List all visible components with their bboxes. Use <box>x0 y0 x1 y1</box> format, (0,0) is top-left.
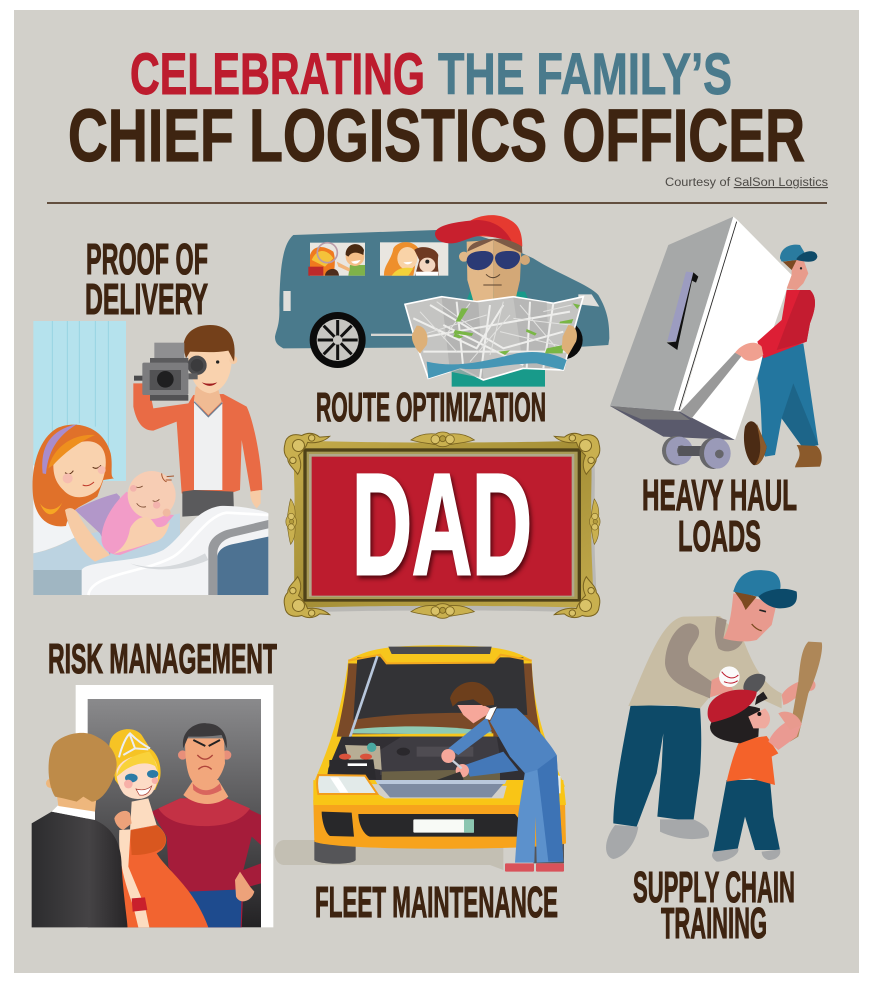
picture frame with DAD <box>284 432 600 618</box>
heading: proof of delivery: PROOF OF <box>86 235 208 284</box>
title line 1: THE FAMILY’S <box>438 42 732 107</box>
blanket and bed rail <box>82 506 268 595</box>
DAD text: DAD <box>352 444 532 605</box>
van body <box>275 230 609 348</box>
ornaments <box>284 432 600 618</box>
title line 1: CELEBRATING <box>130 42 425 107</box>
heading: supply chain training <box>633 863 795 948</box>
mother <box>33 424 120 562</box>
bed <box>33 465 180 595</box>
curtain <box>33 321 126 481</box>
white frame <box>76 685 273 927</box>
bat <box>790 642 822 742</box>
car front <box>313 775 566 849</box>
map <box>405 297 583 380</box>
credit: Courtesy of SalSon Logistics <box>665 177 828 189</box>
illustration: car with mechanic <box>275 645 566 872</box>
refrigerator <box>610 217 792 440</box>
illustration: prom date and father <box>32 685 273 927</box>
baby <box>101 471 176 555</box>
frame shadow <box>297 445 596 613</box>
heading: risk management: RISK MANAGEMENT <box>48 635 277 682</box>
mechanic <box>437 682 564 872</box>
driver <box>435 215 545 387</box>
van windows <box>283 242 599 336</box>
mover <box>735 245 822 467</box>
illustration: van and map <box>275 215 609 387</box>
boy <box>708 674 802 862</box>
heading: supply chain training: TRAINING <box>661 899 767 948</box>
young man from behind <box>32 733 132 927</box>
heading: proof of delivery <box>85 235 208 324</box>
title <box>68 42 805 177</box>
hand truck <box>662 353 742 469</box>
raised hood <box>313 645 565 787</box>
title line 1 <box>130 42 732 107</box>
ground shadow <box>275 840 503 870</box>
illustration: father teaching son baseball <box>606 570 822 862</box>
wheels <box>310 312 583 368</box>
gold frame <box>293 440 593 608</box>
heading: heavy haul loads: LOADS <box>678 512 761 561</box>
father with camera <box>133 325 262 517</box>
red canvas <box>312 457 572 596</box>
engine bay <box>327 737 533 780</box>
father <box>606 570 816 859</box>
dark backdrop <box>88 699 261 927</box>
heading: proof of delivery: DELIVERY <box>85 275 208 324</box>
illustration: mover with refrigerator <box>610 217 822 469</box>
heading: heavy haul loads <box>642 471 797 561</box>
girl in orange dress <box>109 729 208 927</box>
illustration: hospital scene <box>33 321 268 595</box>
hands <box>412 325 577 355</box>
tires <box>314 840 564 864</box>
passengers <box>308 242 439 276</box>
angry father <box>152 723 261 927</box>
heading: route optimization: ROUTE OPTIMIZATION <box>316 384 546 430</box>
heading: fleet maintenance: FLEET MAINTENANCE <box>315 878 558 927</box>
